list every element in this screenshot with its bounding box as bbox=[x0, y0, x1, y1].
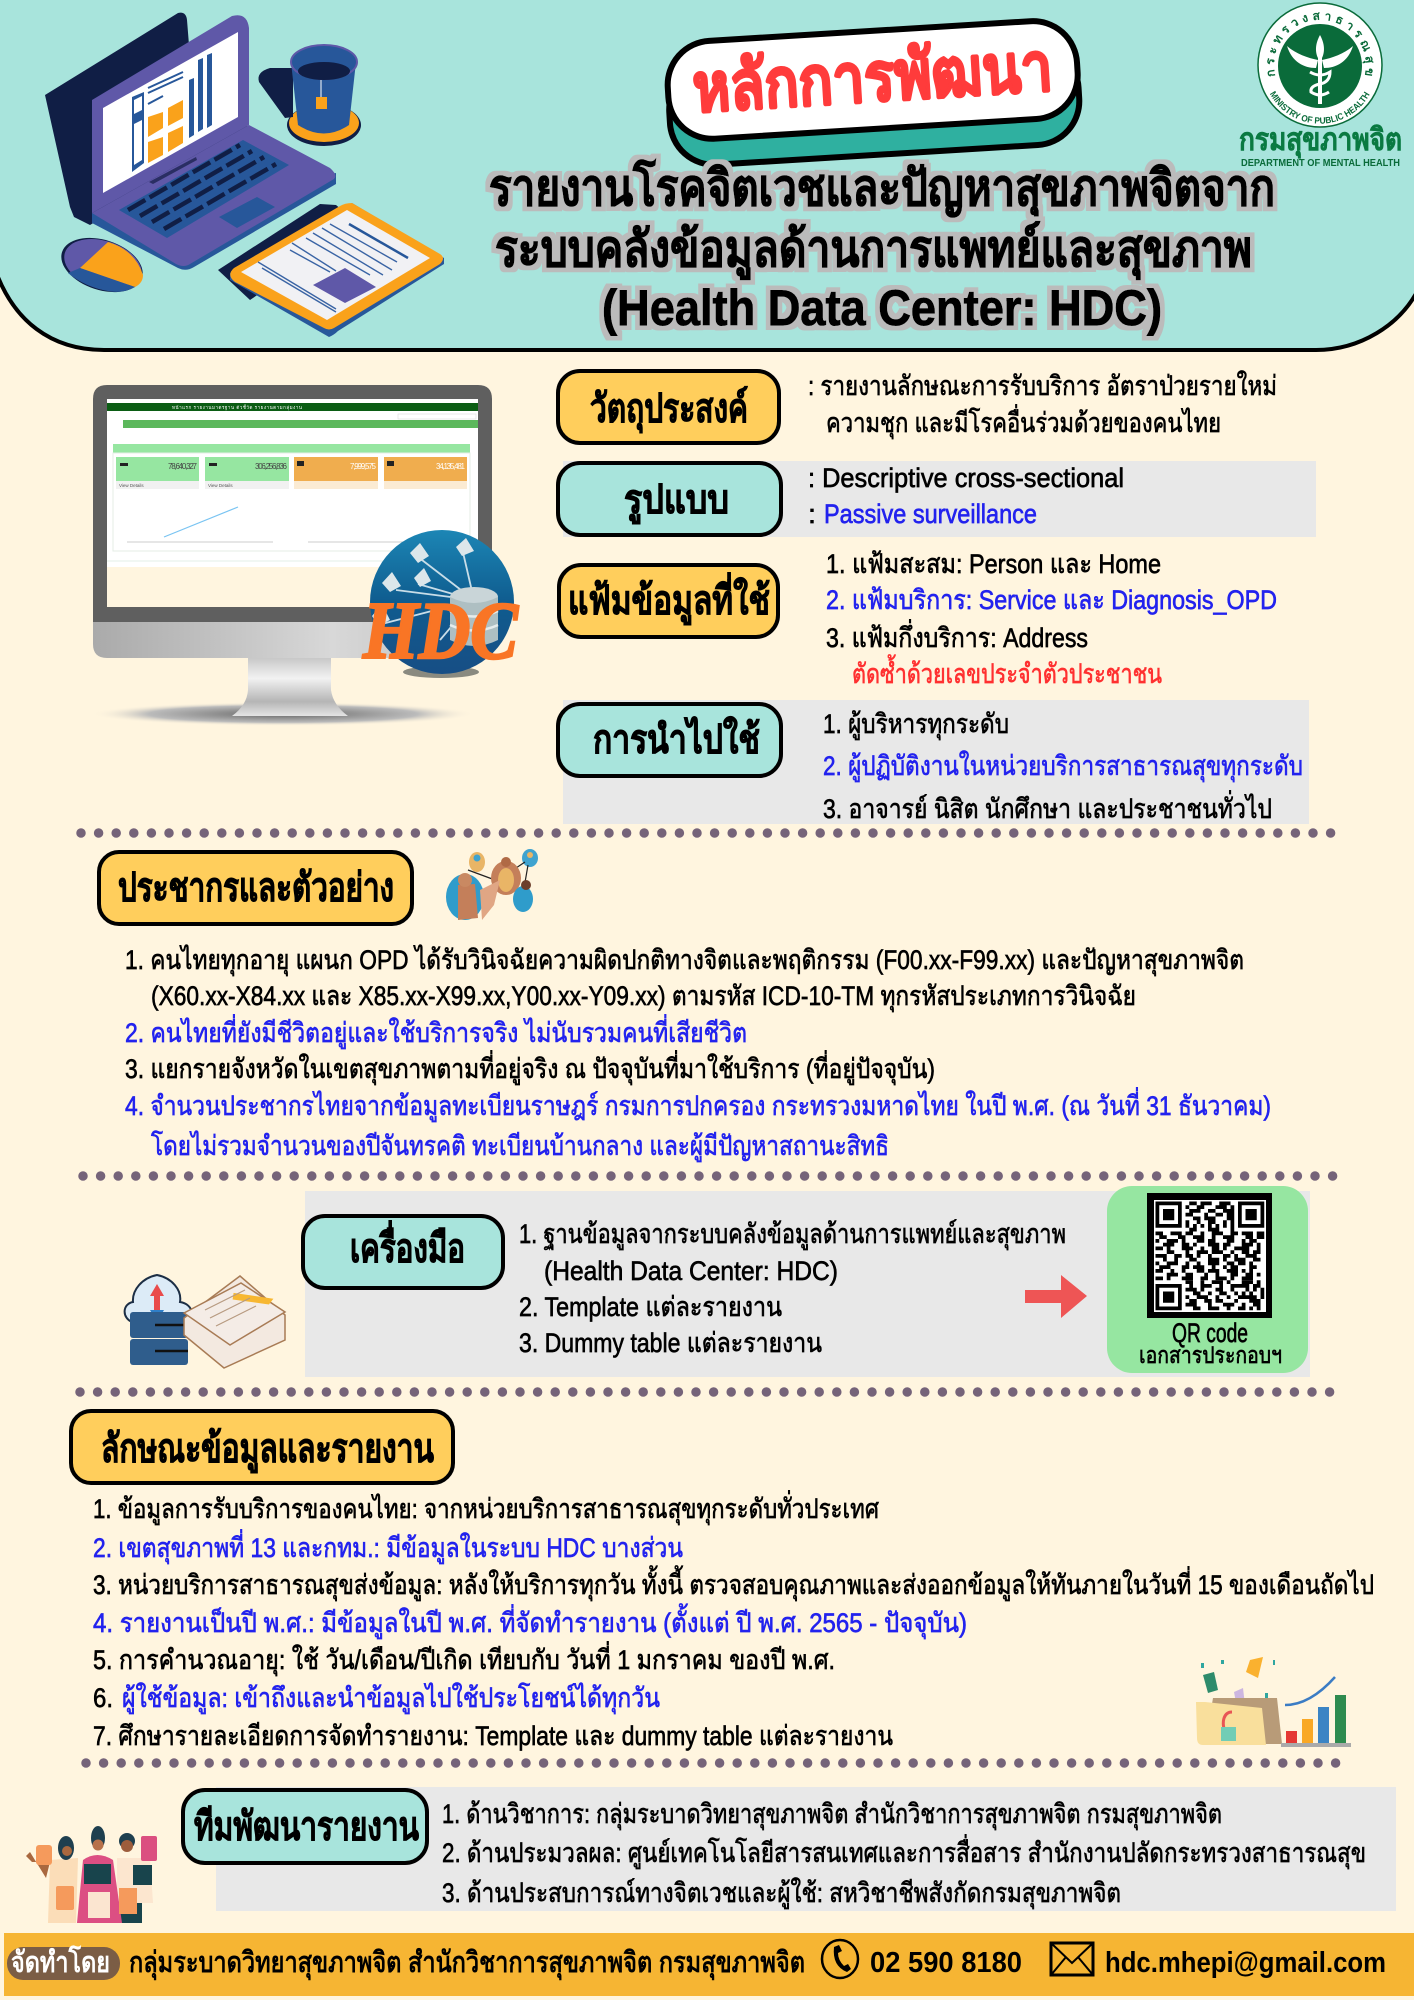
heading: รูปแบบ bbox=[558, 463, 781, 535]
logo: Department of Mental Health: MINISTRY OF PUBLIC HEALTH bbox=[1270, 90, 1370, 124]
text: applications bbox=[823, 709, 1303, 824]
heading text: รายงานโรคจิตเวชและปัญหาสุขภาพจิตจาก bbox=[489, 158, 1275, 219]
QR code card bbox=[1107, 1186, 1308, 1373]
text: team list bbox=[442, 1799, 1366, 1910]
text: applications: 3. อาจารย์ นิสิต นักศึกษา และประชาชนทั่วไป bbox=[823, 790, 1272, 824]
text: data characteristics bbox=[93, 1490, 1374, 1751]
panel: ประชากรและตัวอย่าง bbox=[99, 849, 1271, 1162]
text: data files: 1. แฟ้มสะสม: Person และ Home bbox=[826, 549, 1161, 579]
title badge: หลักการพัฒนา: หลักการพัฒนา bbox=[691, 29, 1055, 127]
heading: ทีมพัฒนารายงาน: ทีมพัฒนารายงาน bbox=[194, 1805, 419, 1849]
QR code pattern bbox=[1156, 1203, 1264, 1308]
text: tools list: 3. Dummy table แต่ละรายงาน bbox=[519, 1328, 822, 1358]
text: data characteristics: 2. เขตสุขภาพที่ 13 และกทม.: มีข้อมูลในระบบ HDC บางส่วน bbox=[93, 1529, 683, 1565]
panel: การนำไปใช้ bbox=[558, 704, 1303, 824]
panel: รูปแบบ bbox=[558, 463, 1124, 535]
icon: team with devices bbox=[26, 1826, 157, 1923]
heading: ลักษณะข้อมูลและรายงาน: ลักษณะข้อมูลและรายงาน bbox=[101, 1427, 434, 1473]
text: applications: 2. ผู้ปฏิบัติงานในหน่วยบริการสาธารณสุขทุกระดับ bbox=[823, 750, 1303, 783]
text: data characteristics: ผู้ใช้ข้อมูล: เข้าถึงและนำข้อมูลไปใช้ประโยชน์ได้ทุกวัน bbox=[122, 1682, 660, 1715]
icon: phone bbox=[822, 1940, 858, 1978]
text: study design: Passive surveillance bbox=[824, 499, 1037, 529]
icon: people network bbox=[446, 849, 538, 920]
text: study design bbox=[808, 463, 1124, 529]
icon: cloud servers and documents bbox=[125, 1275, 285, 1368]
panel: ทีมพัฒนารายงาน bbox=[26, 1787, 1396, 1923]
heading: ประชากรและตัวอย่าง: ประชากรและตัวอย่าง bbox=[118, 866, 394, 910]
dashboard screenshot bbox=[107, 399, 478, 567]
dashboard screenshot: 306,256,836 bbox=[255, 462, 288, 471]
text: tools list bbox=[519, 1218, 1066, 1358]
heading: วัตถุประสงค์ bbox=[558, 371, 779, 443]
heading: แฟ้มข้อมูลที่ใช้: แฟ้มข้อมูลที่ใช้ bbox=[568, 572, 770, 625]
text: team list: 3. ด้านประสบการณ์ทางจิตเวชและผู้ใช้: สหวิชาชีพสังกัดกรมสุขภาพจิต bbox=[442, 1877, 1121, 1910]
text: population criteria: 1. คนไทยทุกอายุ แผนก OPD ได้รับวินิจฉัยความผิดปกติทางจิตและพฤติกรรม (F00.xx-F99.xx) และปัญหาสุขภาพจิต bbox=[125, 945, 1244, 977]
footer bar bbox=[4, 1933, 1414, 1996]
text: population criteria: 3. แยกรายจังหวัดในเขตสุขภาพตามที่อยู่จริง ณ ปัจจุบันที่มาใช้บริการ (ที่อยู่ปัจจุบัน) bbox=[125, 1050, 935, 1086]
dashboard screenshot: View Details bbox=[119, 483, 144, 488]
arrow bbox=[1025, 1275, 1087, 1318]
text: population criteria bbox=[125, 945, 1271, 1162]
title badge: หลักการพัฒนา bbox=[665, 19, 1082, 167]
panel: วัตถุประสงค์ bbox=[558, 370, 1277, 443]
dashboard screenshot: 7,999,575 bbox=[350, 462, 377, 471]
text: data characteristics: 7. ศึกษารายละเอียดการจัดทำรายงาน: Template และ dummy table แต่ละรายงาน bbox=[93, 1721, 893, 1751]
text: data characteristics: 4. รายงานเป็นปี พ.ศ.: มีข้อมูลในปี พ.ศ. ที่จัดทำรายงาน (ตั้งแต่ ปี พ.ศ. 2565 - ปัจจุบัน) bbox=[93, 1603, 967, 1640]
icon: folder and bar chart bbox=[1196, 1657, 1351, 1747]
heading text bbox=[489, 158, 1275, 336]
heading: เครื่องมือ: เครื่องมือ bbox=[350, 1220, 465, 1271]
text: population criteria: โดยไม่รวมจำนวนของปีจันทรคติ ทะเบียนบ้านกลาง และผู้มีปัญหาสถานะสิทธิ bbox=[151, 1131, 889, 1162]
text: objective: ความชุก และมีโรคอื่นร่วมด้วยของคนไทย bbox=[826, 404, 1221, 440]
icon: mail bbox=[1051, 1943, 1093, 1975]
text: team list: 1. ด้านวิชาการ: กลุ่มระบาดวิทยาสุขภาพจิต สำนักวิชาการสุขภาพจิต กรมสุขภาพจิต bbox=[442, 1799, 1222, 1831]
text: tools list: (Health Data Center: HDC) bbox=[544, 1256, 838, 1286]
monitor with HDC dashboard bbox=[91, 385, 519, 726]
heading: เครื่องมือ bbox=[303, 1216, 503, 1288]
panel: เครื่องมือ bbox=[125, 1186, 1310, 1377]
header banner bbox=[0, 0, 1414, 352]
text: data files: 3. แฟ้มกึ่งบริการ: Address bbox=[826, 619, 1088, 653]
text: population criteria: 2. คนไทยที่ยังมีชีวิตอยู่และใช้บริการจริง ไม่นับรวมคนที่เสียชีวิต bbox=[125, 1014, 747, 1049]
heading: วัตถุประสงค์: วัตถุประสงค์ bbox=[590, 386, 748, 434]
heading: การนำไปใช้: การนำไปใช้ bbox=[593, 716, 760, 762]
heading text: ระบบคลังข้อมูลด้านการแพทย์และสุขภาพ bbox=[495, 221, 1252, 280]
logo: Department of Mental Health bbox=[1239, 2, 1402, 169]
dashboard screenshot: 78,640,327 bbox=[168, 462, 198, 471]
email: hdc.mhepi@gmail.com bbox=[1105, 1947, 1386, 1979]
phone number: 02 590 8180 bbox=[870, 1947, 1022, 1979]
logo: Department of Mental Health: กระทรวงสาธารณสุข bbox=[1267, 12, 1374, 77]
organiser name: กลุ่มระบาดวิทยาสุขภาพจิต สำนักวิชาการสุขภาพจิต กรมสุขภาพจิต bbox=[129, 1947, 805, 1980]
text: data characteristics: 6. bbox=[93, 1683, 113, 1713]
heading: ลักษณะข้อมูลและรายงาน bbox=[71, 1411, 453, 1483]
text: objective bbox=[808, 370, 1277, 440]
text: data files bbox=[826, 549, 1277, 689]
text: tools list: 1. ฐานข้อมูลจากระบบคลังข้อมูลด้านการแพทย์และสุขภาพ bbox=[519, 1218, 1066, 1251]
HDC globe logo: HDC bbox=[362, 585, 519, 676]
caption: QR code: เอกสารประกอบฯ bbox=[1139, 1342, 1282, 1368]
dashboard screenshot: 34,135,481 bbox=[436, 462, 466, 471]
text: data files: 2. แฟ้มบริการ: Service และ Diagnosis_OPD bbox=[826, 585, 1277, 615]
organiser label: จัดทำโดย bbox=[11, 1944, 110, 1979]
caption: QR code: QR code bbox=[1172, 1318, 1248, 1348]
text: study design: : Descriptive cross-sectional bbox=[808, 463, 1124, 493]
caption: QR code bbox=[1139, 1318, 1282, 1368]
text: population criteria: (X60.xx-X84.xx และ X85.xx-X99.xx,Y00.xx-Y09.xx) ตามรหัส ICD-10-TM ทุกรหัสประเภทการวินิจฉัย bbox=[151, 981, 1136, 1013]
text: applications: 1. ผู้บริหารทุกระดับ bbox=[823, 709, 1009, 741]
gray band: การนำไปใช้ bbox=[563, 700, 1309, 824]
heading: ทีมพัฒนารายงาน bbox=[183, 1790, 427, 1863]
text: data characteristics: 1. ข้อมูลการรับบริการของคนไทย: จากหน่วยบริการสาธารณสุขทุกระดับทั่วประเทศ bbox=[93, 1490, 879, 1526]
HDC globe logo bbox=[362, 530, 519, 678]
text: objective: : รายงานลักษณะการรับบริการ อัตราป่วยรายใหม่ bbox=[808, 370, 1277, 401]
gray band: รูปแบบ bbox=[563, 461, 1316, 537]
text: study design: : bbox=[808, 499, 816, 529]
text: tools list: 2. Template แต่ละรายงาน bbox=[519, 1292, 782, 1322]
illustration: laptop, cup, tablet and mouse bbox=[45, 13, 444, 337]
text: data characteristics: 5. การคำนวณอายุ: ใช้ วัน/เดือน/ปีเกิด เทียบกับ วันที่ 1 มกราคม ของปี พ.ศ. bbox=[93, 1641, 835, 1677]
panel: ลักษณะข้อมูลและรายงาน bbox=[71, 1411, 1374, 1751]
dashboard screenshot: View Details bbox=[208, 483, 233, 488]
panel: แฟ้มข้อมูลที่ใช้ bbox=[559, 549, 1277, 689]
dashboard screenshot: หน้าแรก รายงานมาตรฐาน ตัวชี้วัด รายงานตามกลุ่มงาน bbox=[172, 404, 302, 411]
heading text: (Health Data Center: HDC) bbox=[602, 280, 1162, 336]
text: data files: ตัดซ้ำด้วยเลขประจำตัวประชาชน bbox=[852, 654, 1162, 689]
heading: ประชากรและตัวอย่าง bbox=[99, 852, 412, 924]
heading: แฟ้มข้อมูลที่ใช้ bbox=[559, 565, 778, 637]
heading: การนำไปใช้ bbox=[558, 704, 781, 776]
heading: รูปแบบ: รูปแบบ bbox=[624, 478, 729, 524]
